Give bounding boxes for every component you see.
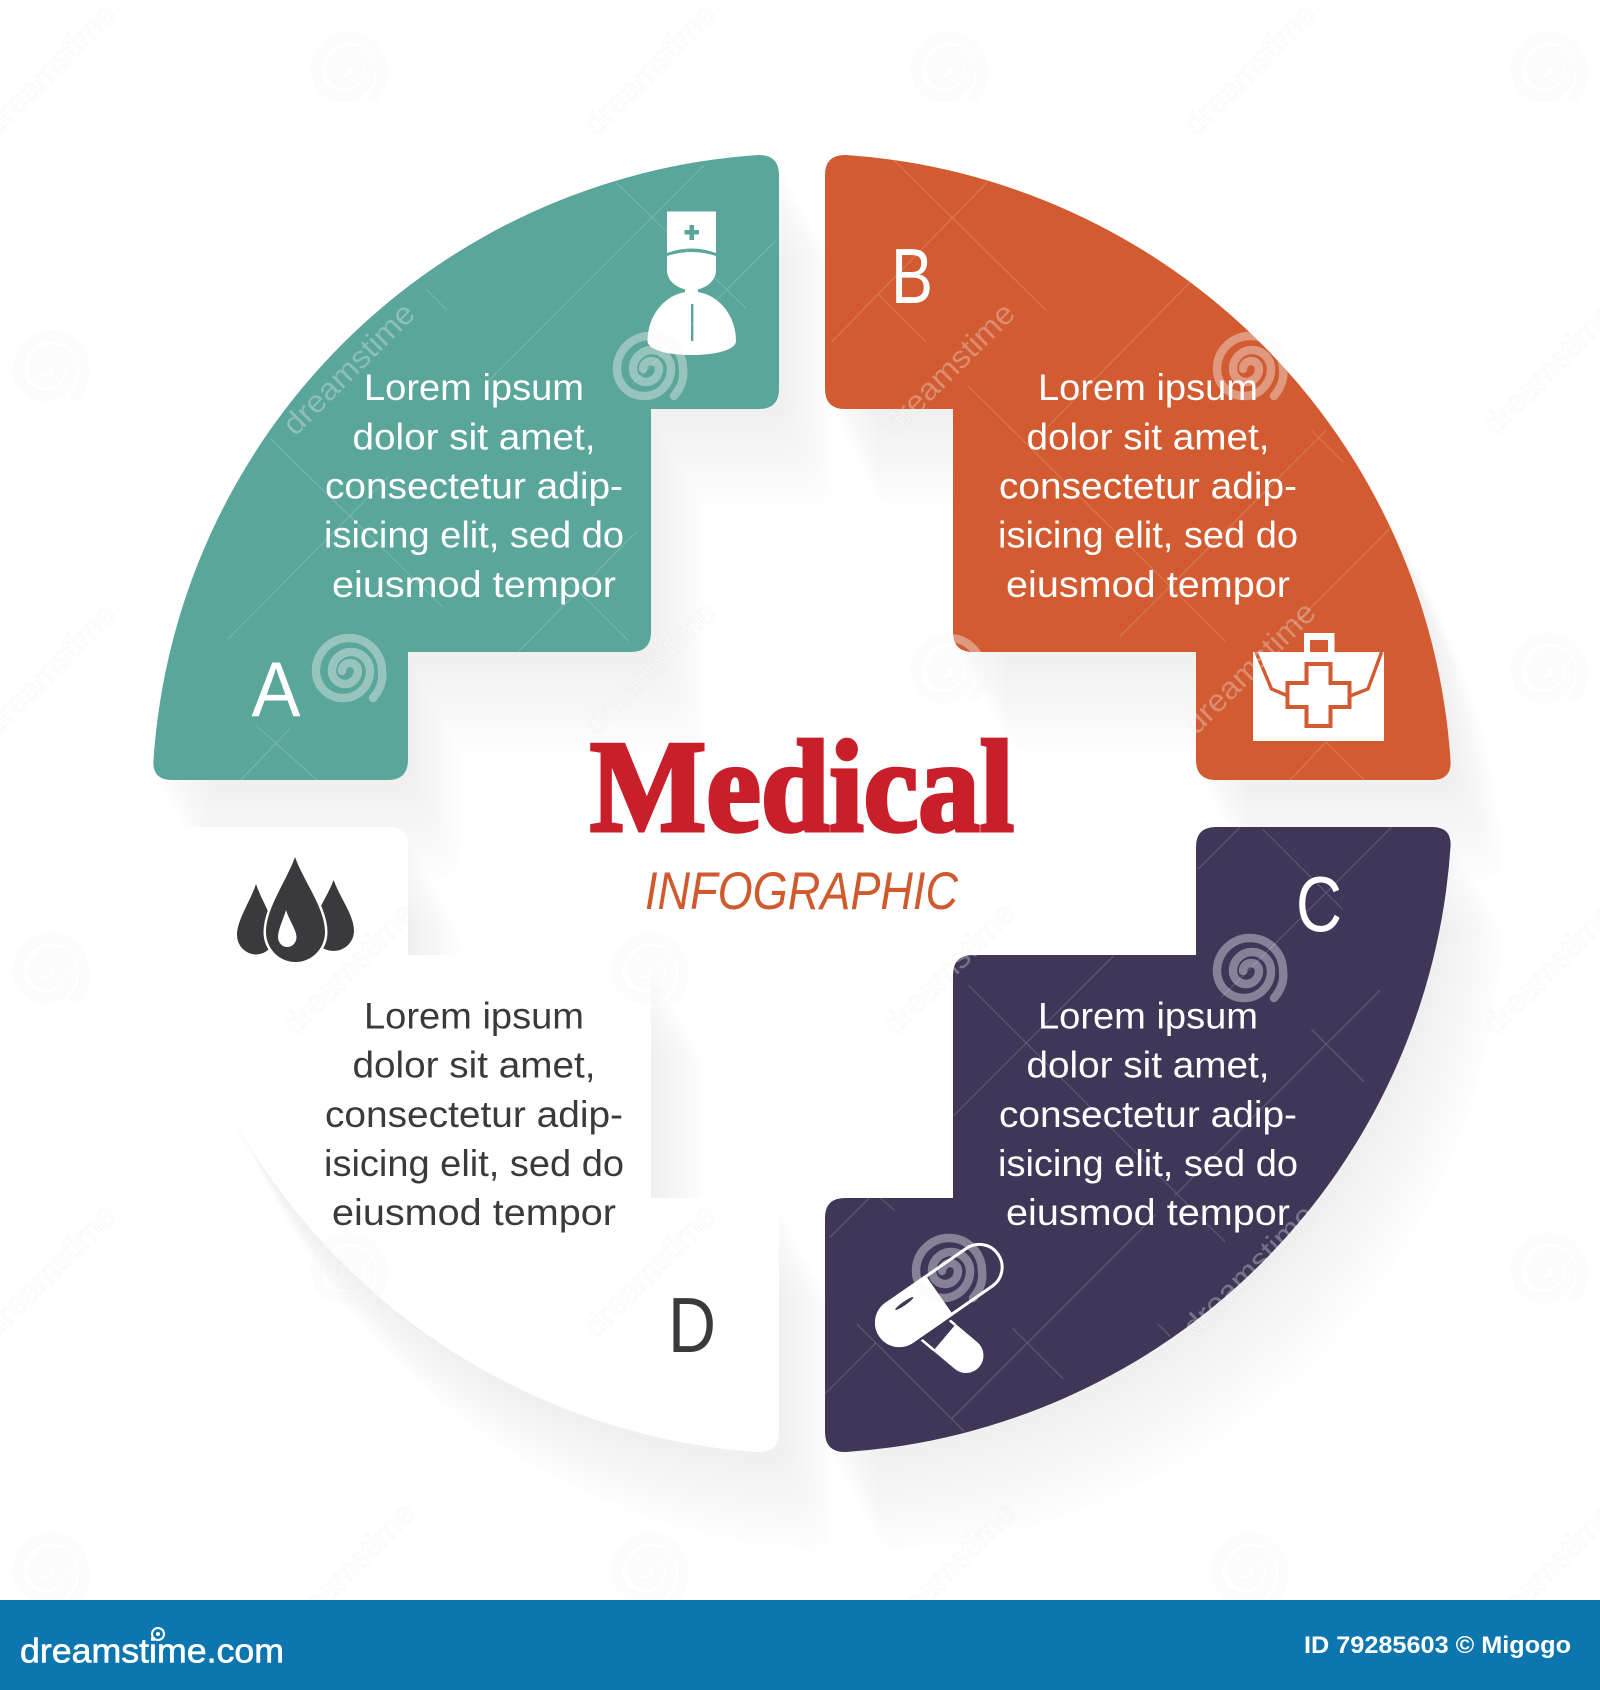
panel A: teal segment [153, 155, 779, 780]
watermark layer: spirals, text and crossing lines: dreamstime [1176, 594, 1323, 741]
watermark layer: spirals, text and crossing lines: dreamstime [875, 1495, 1022, 1642]
letter A: A [252, 645, 300, 733]
icon: nurse [648, 212, 736, 355]
title: Medical [590, 714, 1014, 860]
watermark layer: spirals, text and crossing lines: dreamstime [875, 895, 1022, 1042]
text block B: consectetur adip- [999, 466, 1297, 507]
text block A: consectetur adip- [325, 466, 623, 507]
subtitle: INFOGRAPHIC [645, 862, 959, 921]
icon: drops [237, 857, 354, 962]
letter B: B [891, 232, 933, 320]
text block A [324, 367, 624, 605]
text block D: Lorem ipsum [364, 996, 584, 1036]
text block D: eiusmod tempor [332, 1192, 616, 1233]
text block C: isicing elit, sed do [998, 1143, 1298, 1184]
text block B: Lorem ipsum [1038, 367, 1258, 408]
watermark layer: spirals, text and crossing lines: dreamstime [1176, 0, 1323, 142]
text block C: Lorem ipsum [1038, 996, 1258, 1036]
text block D: consectetur adip- [325, 1094, 623, 1135]
text block D: dolor sit amet, [352, 1045, 596, 1086]
text block B [998, 367, 1298, 605]
watermark layer: spirals, text and crossing lines: dreamstime [275, 1495, 422, 1642]
long drop shadows behind the four segments [157, 162, 1503, 1549]
watermark layer: spirals, text and crossing lines: dreamstime [275, 895, 422, 1042]
letter C: C [1296, 860, 1342, 948]
icon: first aid kit [1253, 633, 1384, 741]
text block C: dolor sit amet, [1026, 1045, 1270, 1086]
footer bar [0, 1600, 1600, 1690]
watermark layer: spirals, text and crossing lines: dreamstime [576, 594, 723, 741]
text block A: eiusmod tempor [332, 564, 616, 605]
text block C: consectetur adip- [999, 1094, 1297, 1135]
text block D: isicing elit, sed do [324, 1143, 624, 1184]
panel D: white segment [153, 827, 779, 1452]
text block B: dolor sit amet, [1026, 416, 1270, 457]
letter D: D [668, 1281, 716, 1369]
text block A: dolor sit amet, [352, 416, 596, 457]
icon: pills [865, 1233, 1013, 1380]
footer image id: ID 79285603 © Migogo [1304, 1632, 1571, 1659]
watermark layer: spirals, text and crossing lines: dreamstime [576, 1197, 723, 1344]
watermark layer: spirals, text and crossing lines: dreamstime [875, 295, 1022, 442]
text block D [324, 996, 624, 1233]
text block A: Lorem ipsum [364, 367, 584, 408]
panel B: orange segment [825, 155, 1451, 780]
watermark layer: spirals, text and crossing lines: dreamstime [1175, 1197, 1322, 1344]
text block A: isicing elit, sed do [324, 515, 624, 556]
text block C [998, 996, 1298, 1233]
text block C: eiusmod tempor [1006, 1192, 1290, 1233]
footer logo text: dreamstime.com [20, 1632, 284, 1670]
text block B: eiusmod tempor [1006, 564, 1290, 605]
panel C: navy segment [825, 827, 1451, 1452]
watermark layer: spirals, text and crossing lines: dreamstime [576, 0, 723, 142]
text block B: isicing elit, sed do [998, 515, 1298, 556]
watermark layer: spirals, text and crossing lines: dreamstime [275, 295, 422, 442]
